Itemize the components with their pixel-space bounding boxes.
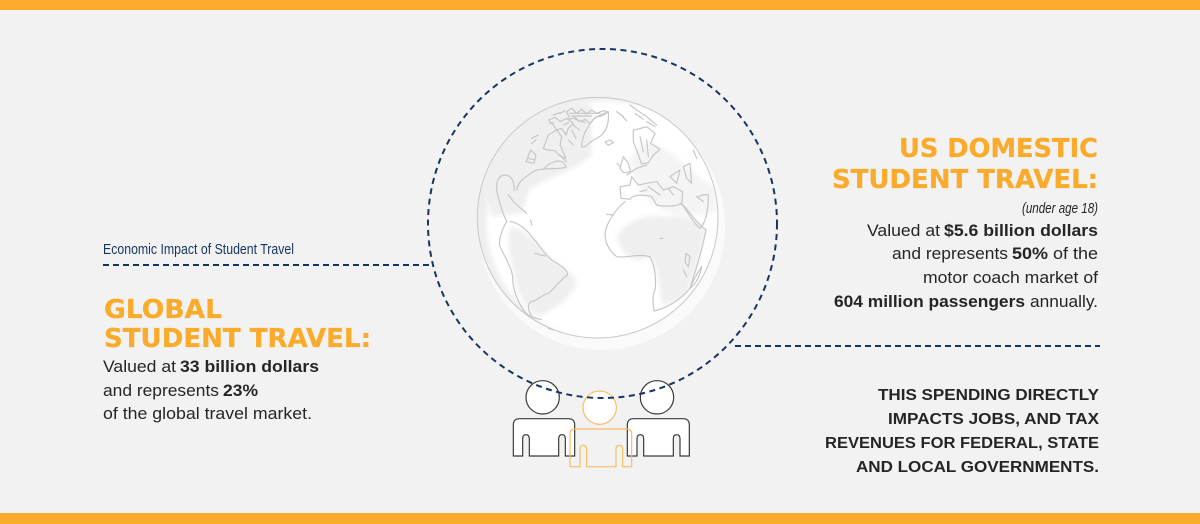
continent coastlines	[497, 105, 708, 330]
right dashed divider line	[735, 345, 1100, 347]
section label: Economic Impact of Student Travel	[103, 242, 294, 258]
heading: global student travel: STUDENT TRAVEL:	[104, 324, 371, 354]
domestic body text: and represents	[892, 245, 1008, 263]
domestic body text: 50%	[1012, 245, 1048, 263]
spending impact statement: IMPACTS JOBS, AND TAX	[888, 411, 1100, 428]
spending impact statement	[825, 387, 1100, 476]
dashed ring around globe	[428, 49, 777, 398]
domestic body text: of the	[1053, 245, 1098, 263]
spending impact statement: REVENUES FOR FEDERAL, STATE	[825, 435, 1099, 452]
domestic body text: 604 million passengers	[834, 293, 1025, 311]
top orange bar	[0, 0, 1200, 10]
global body text	[103, 358, 319, 423]
domestic body text	[834, 222, 1098, 311]
right text column	[735, 134, 1100, 476]
globe illustration	[477, 97, 728, 350]
heading: global student travel	[104, 295, 371, 354]
global body text: 23%	[223, 382, 258, 400]
heading: global student travel: GLOBAL	[104, 295, 222, 325]
icon: centre person in orange	[570, 391, 632, 467]
spending impact statement: AND LOCAL GOVERNMENTS.	[856, 459, 1099, 476]
domestic body text: $5.6 billion dollars	[944, 222, 1098, 240]
domestic body text: Valued at	[867, 222, 940, 240]
heading: us domestic student travel	[832, 134, 1098, 195]
heading: us domestic student travel: US DOMESTIC	[899, 134, 1098, 164]
domestic body text: motor coach market of	[923, 269, 1098, 287]
globe white glow crescent	[478, 103, 725, 350]
global body text: of the global travel market.	[103, 405, 312, 423]
global body text: 33 billion dollars	[180, 358, 319, 376]
globe outline	[477, 97, 718, 338]
left dashed leader line	[103, 264, 429, 266]
icon: right person	[627, 381, 689, 456]
age note: (under age 18)	[1022, 200, 1098, 217]
domestic body text: annually.	[1030, 293, 1098, 311]
global body text: and represents	[103, 382, 219, 400]
heading: us domestic student travel: STUDENT TRAVEL:	[832, 165, 1098, 195]
globe disc	[477, 97, 718, 338]
icon: left person	[513, 381, 575, 456]
global body text: Valued at	[103, 358, 176, 376]
people icons	[513, 381, 689, 467]
bottom orange bar	[0, 513, 1200, 524]
spending impact statement: THIS SPENDING DIRECTLY	[878, 387, 1100, 404]
ocean highlight and land shading	[480, 101, 728, 342]
left text column	[103, 242, 429, 423]
